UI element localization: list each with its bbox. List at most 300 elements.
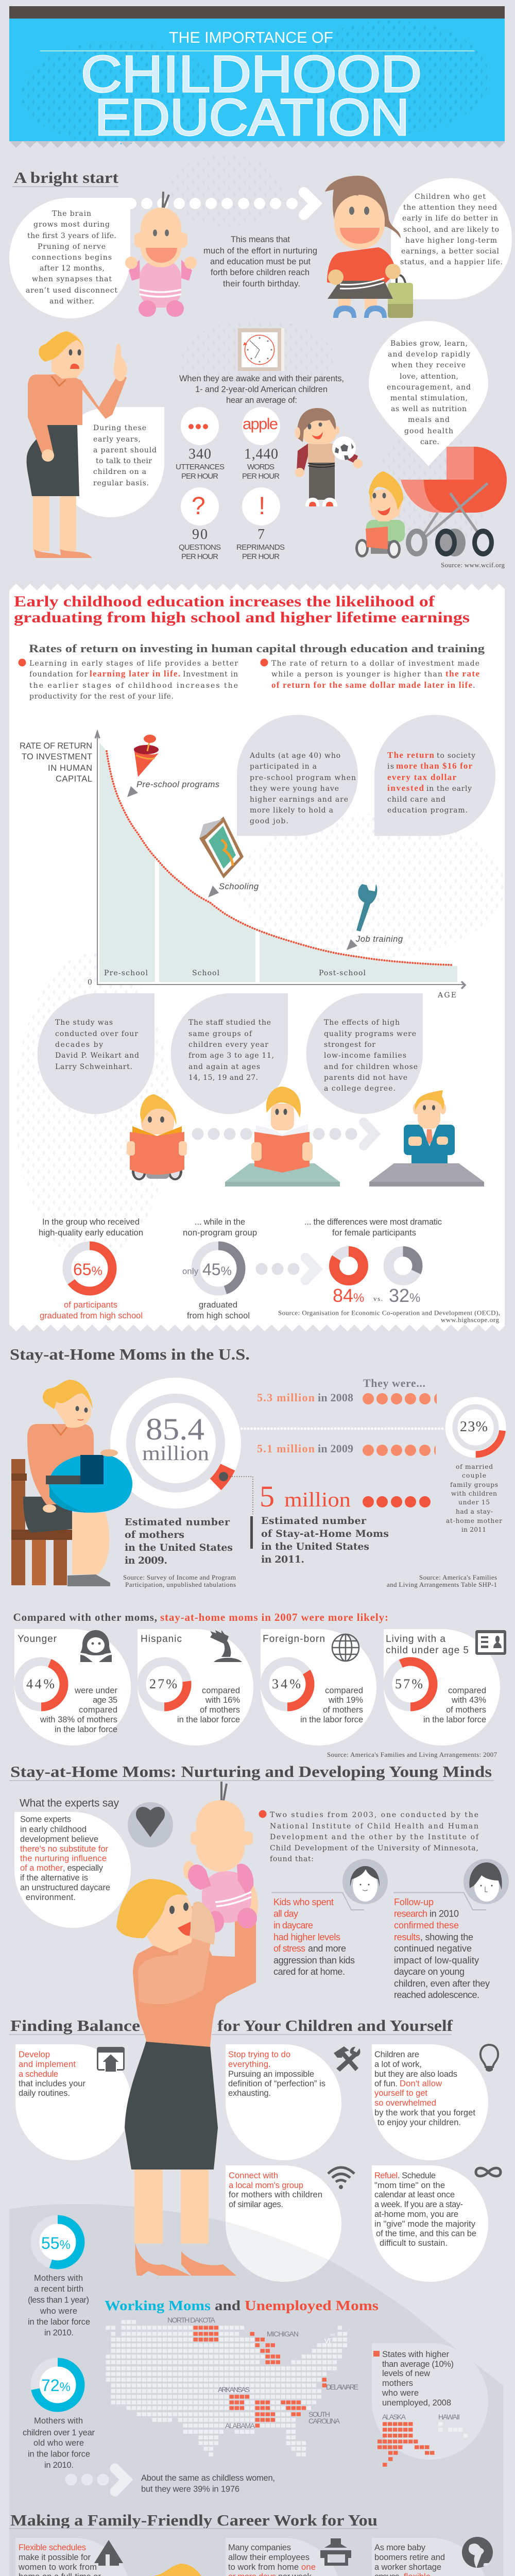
text: effort before fourth birthday: much of the effort in nurturing (203, 246, 317, 256)
subheading: Rates of return on investing in human capital through education and training (29, 642, 485, 655)
stat: 5 million stay-at-home moms (260, 1480, 497, 1588)
stat: they were, by year: They were... (363, 1377, 425, 1389)
finding: follow-up research: children, even after they (394, 1978, 490, 1989)
icon: id card (475, 1630, 506, 1655)
stat: 23 percent: couple (462, 1472, 486, 1479)
stat: 55 percent mothers in labor force: who were (40, 2307, 77, 2316)
text: what the experts say (14, 1797, 131, 1928)
speech bubble: babies grow: Babies grow, learn, (390, 340, 468, 348)
bullet text: rate of return: The rate of return to a dollar of investment made (271, 659, 479, 668)
axis labels (88, 969, 456, 999)
label: pre-school programs: Pre-school programs (136, 780, 219, 789)
heading: finding balance (9, 2016, 453, 2035)
speech bubble: children who get attention: school, and are likely to (403, 226, 499, 234)
dotted arrow (255, 1258, 316, 1280)
axis labels: Post-school (319, 969, 366, 977)
stat: 55 percent mothers in labor force: in 2010. (44, 2328, 74, 2337)
speech bubble: children who get attention: the attention they need (403, 204, 497, 212)
heading: finding balance: for Your Children and Yourself (217, 2016, 453, 2035)
card: child under five: of mothers (446, 1705, 486, 1715)
heading: nurturing young minds: Stay-at-Home Moms: Nurturing and Developing Young Minds (10, 1762, 492, 1781)
stat: 55 percent mothers in labor force: 55% (41, 2234, 71, 2252)
tip: stop trying to do everything: Pursuing an impossible (228, 2070, 314, 2079)
stat: 340 utterances per hour: 340 (188, 446, 211, 462)
bubble: adults at age 40: Adults (at age 40) who (249, 752, 340, 760)
tip: refuel: "mom time" on the (374, 2181, 445, 2190)
heading: family-friendly career: Making a Family-Friendly Career Work for You (10, 2511, 377, 2529)
card: foreign-born: 34% (272, 1676, 301, 1691)
card: younger: 44% (26, 1676, 55, 1691)
map legend: than average (10%) (382, 2360, 454, 2369)
card: hispanic: of mothers (200, 1705, 240, 1715)
card: child under five: with 43% (451, 1696, 486, 1705)
finding: follow-up research: research (394, 1908, 427, 1919)
card: child under five (380, 1629, 506, 1745)
speech bubble: parent should talk: early years, (93, 435, 141, 444)
title (40, 28, 474, 146)
bubble: flexible schedules: Flexible schedules (19, 2543, 86, 2552)
stat: 45 percent: non-program group (183, 1228, 257, 1238)
stat: 90 questions per hour: PER HOUR (181, 552, 218, 561)
stat: 55 percent mothers in labor force: Mothers with (34, 2274, 83, 2283)
title: THE IMPORTANCE OF (169, 28, 333, 46)
finding: follow-up research: impact of low-quality (394, 1955, 479, 1965)
connector line (230, 1477, 253, 1549)
bubble: study conducted: decades by (55, 1041, 103, 1049)
bubble: study conducted (38, 993, 154, 1114)
finding: kids in daycare: in daycare (273, 1920, 313, 1930)
source note: Source: Organisation for Economic Co-operation and Development (OECD), (278, 1309, 500, 1317)
stat: 23 percent: at-home mother (446, 1517, 502, 1524)
map legend: levels of new (382, 2369, 430, 2378)
bubble: adults at age 40: they were young have (250, 785, 339, 793)
bubble: study conducted: David P. Weikart and (55, 1052, 139, 1060)
tip: refuel: difficult to sustain. (380, 2239, 448, 2248)
bubble: effects of high quality: parents did not have (324, 1074, 407, 1082)
icon: book (199, 817, 244, 878)
baby held up (183, 1782, 258, 1933)
icon: house (94, 2540, 123, 2566)
tip: children are loads of fun: yourself to get (374, 2089, 427, 2098)
panel: working moms background (9, 2204, 503, 2576)
label: schooling: Schooling (219, 882, 259, 891)
bubble: effects of high quality: quality programs were (324, 1030, 416, 1038)
text: what the experts say: environment. (26, 1893, 76, 1902)
card: child under five: compared (448, 1686, 486, 1695)
bubble: staff studied: same groups of (188, 1030, 253, 1038)
speech bubble: brain growth: the first 3 years of life. (27, 232, 116, 240)
speech bubble: babies grow: care. (420, 438, 439, 446)
stat: 5 million stay-at-home moms: of Stay-at-Home Moms (261, 1528, 389, 1539)
stat: 23 percent: of married (456, 1463, 493, 1470)
bubble: flexible schedules: make it possible for (19, 2553, 91, 2562)
speech bubble: brain growth: aren’t used disconnect (26, 286, 117, 295)
text: what children hear (179, 374, 344, 405)
bullet text: learning early: the earlier stages of childhood increases the (29, 682, 238, 690)
stat: 65 percent: In the group who received (42, 1217, 140, 1227)
finding: kids in daycare: of stress (273, 1943, 305, 1954)
label: pre-school programs (127, 780, 219, 797)
bullet text: rate of return: . (473, 682, 475, 690)
text: what the experts say: , especially (63, 1863, 104, 1873)
card: younger: with 38% of mothers (40, 1715, 117, 1724)
finding: kids in daycare: Kids who spent (273, 1897, 334, 1907)
text: what the experts say: in early childhood (20, 1825, 87, 1834)
bubble: telecommuting (226, 2538, 351, 2576)
bubble: staff studied (171, 993, 288, 1114)
icon: girl face (342, 1859, 388, 1904)
state labels: MICHIGAN (267, 2330, 299, 2338)
stat: 23 percent: with children (451, 1490, 497, 1497)
finding: follow-up research: in 2010 (430, 1908, 459, 1919)
card: foreign-born: in the labor force (300, 1715, 363, 1724)
card: younger: compared (79, 1705, 117, 1715)
heading: compared with other moms: Compared with other moms, (13, 1611, 157, 1623)
speech bubble: babies grow (369, 321, 488, 466)
tip: children are loads of fun: Children are (374, 2050, 419, 2059)
speech bubble: babies grow: as well as nutrition (391, 405, 467, 413)
dotted arrow: baby to child (125, 192, 315, 215)
state labels: CAROLINA (308, 2417, 340, 2425)
bubble: return to society: invested (387, 783, 424, 793)
bubble: effects of high quality: strongest for (324, 1041, 375, 1049)
bullet text: two studies: Child Development of the University of Minnesota, (270, 1844, 478, 1853)
stat label: number of mothers: Participation, unpublished tabulations (125, 1581, 236, 1588)
bubble: return to society: child care and (387, 795, 445, 804)
text: what children hear: When they are awake and with their parents, (179, 374, 344, 383)
bubble: adults at age 40: good job. (250, 817, 288, 825)
bubble: return to society: more than $16 for (396, 761, 472, 771)
text: effort before fourth birthday: forth before children reach (211, 268, 310, 277)
finding: kids in daycare: all day (273, 1908, 298, 1919)
stat: 5 million stay-at-home moms: Estimated number (261, 1515, 367, 1527)
stat: 72 percent mothers in labor force (23, 2362, 95, 2470)
stat: 45 percent: graduated (199, 1300, 237, 1310)
stat: 1,440 words per hour: apple (243, 415, 278, 433)
finding: follow-up research: , showing the (420, 1932, 473, 1942)
tip: connect with a local group: Connect with (229, 2171, 278, 2180)
stat: 5 million stay-at-home moms: Source: America's Families (419, 1573, 497, 1581)
text: what the experts say: there's no substitute for (20, 1844, 108, 1854)
map legend: mothers (382, 2379, 413, 2388)
speech bubble: babies grow: good health (404, 427, 453, 435)
stat: 340 utterances per hour (176, 407, 225, 481)
illustration: adult at desk (369, 1090, 484, 1187)
state labels: ALABAMA (225, 2421, 255, 2430)
text: what the experts say: if the alternative is (20, 1873, 88, 1883)
illustration: mother holding baby carrier (11, 1380, 132, 1586)
axis labels: School (192, 969, 220, 977)
stat: 55 percent mothers in labor force: in the labor force (28, 2317, 90, 2327)
axis labels: AGE (437, 991, 456, 999)
card: child under five: 57% (395, 1676, 423, 1691)
text: what children hear: hear an average of: (226, 396, 297, 405)
tip: children are loads of fun: by the work that you forget (374, 2108, 475, 2117)
tip: connect with a local group: of similar ages. (229, 2200, 283, 2209)
y-axis label (20, 741, 92, 784)
card: hispanic: Hispanic (141, 1634, 182, 1645)
bubble: study conducted: Larry Schweinhart. (55, 1063, 132, 1071)
stat: 23 percent: under 15 (458, 1499, 490, 1506)
card: foreign-born: compared (325, 1686, 363, 1695)
stat: 72 percent mothers in labor force: in 2010. (44, 2461, 74, 2470)
stat: 84 versus 32 percent (304, 1217, 442, 1306)
stat: 45 percent (182, 1217, 257, 1320)
chart: rate of return by age (20, 732, 465, 999)
y-axis label: IN HUMAN (48, 764, 92, 773)
stat label: number of mothers: in 2009. (125, 1555, 167, 1566)
state labels: NORTH DAKOTA (167, 2316, 216, 2324)
bullet text: learning early: learning later in life. (90, 669, 180, 679)
axis labels: 0 (88, 978, 92, 987)
bubble: return to society: is (387, 762, 394, 771)
stat: 7 reprimands per hour: REPRIMANDS (236, 543, 285, 552)
stat: they were, by year: in 2009 (318, 1442, 353, 1455)
speech bubble: parent should talk: children on a (93, 468, 146, 476)
map: unemployed new mothers by state (106, 2316, 358, 2454)
dotted arrow: children growing up (192, 1122, 374, 1146)
bullet text: two studies: Development and the other by the Institute of (270, 1833, 479, 1841)
bubble: adults at age 40 (237, 715, 358, 836)
panel heading: graduating from high school and higher lifetime earnings (14, 609, 470, 626)
stat: they were, by year: in 2008 (318, 1391, 353, 1404)
bubble: adults at age 40: pre-school program when (250, 774, 356, 782)
tip: connect with a local group (226, 2165, 354, 2282)
bubble: effects of high quality: The effects of high (324, 1019, 400, 1027)
panel: early childhood education (9, 584, 505, 1331)
finding: follow-up research: continued negative (394, 1943, 472, 1954)
source note: Source: www.wcif.org (441, 561, 505, 569)
stat: they were, by year: 5.3 million (257, 1391, 315, 1404)
stat: 72 percent mothers in labor force: children over 1 year (23, 2428, 95, 2437)
tip: develop a schedule: Develop (19, 2050, 50, 2059)
map legend (372, 2343, 488, 2465)
tip: refuel: . Schedule (398, 2171, 436, 2180)
heading: finding balance: Finding Balance (10, 2016, 140, 2035)
text: what the experts say: the nurturing influence (20, 1854, 107, 1863)
heading: working and unemployed moms (105, 2298, 379, 2313)
bubble: staff studied: 14, 15, 19 and 27. (188, 1074, 258, 1082)
stat: 5 million stay-at-home moms: million (284, 1488, 351, 1511)
stat: 84 versus 32 percent: for female participants (332, 1228, 416, 1238)
state labels: NH (330, 2334, 335, 2337)
bubble: telecommuting: one (301, 2563, 316, 2572)
stat: they were, by year: 5.1 million (257, 1442, 315, 1455)
illustration: toddler with book (355, 471, 405, 558)
map legend: who were (382, 2388, 419, 2398)
chart: 85.4 million ring (99, 1367, 252, 1519)
state labels: DELAWARE (326, 2383, 358, 2391)
finding: follow-up research: reached adolescence. (394, 1990, 479, 2000)
label: job training (347, 935, 403, 950)
speech bubble: parent should talk: to talk to their (96, 457, 152, 465)
finding: kids in daycare: and more (308, 1943, 346, 1954)
card: younger: were under (74, 1686, 117, 1695)
bubble: staff studied: and again at ages (188, 1063, 260, 1071)
tip: children are loads of fun: so overwhelmed (374, 2098, 436, 2108)
heading: a bright start: A bright start (14, 168, 119, 187)
stat: 5 million stay-at-home moms: in the United States (261, 1541, 369, 1552)
bubble: flexible schedules more common: a worker shortage (374, 2563, 441, 2572)
y-axis label: TO INVESTMENT (22, 752, 92, 761)
finding: follow-up research: Follow-up (394, 1897, 434, 1907)
bubble: return to society: education program. (387, 806, 468, 815)
bullet text: rate of return (261, 658, 479, 690)
panel heading (14, 593, 470, 626)
tip: stop trying to do everything: Stop trying to do (228, 2050, 290, 2059)
speech bubble: children who get attention: Children who get (415, 193, 486, 201)
bubble: telecommuting: allow their employees (228, 2553, 310, 2562)
dotted arrow with childless women note: but they were 39% in 1976 (141, 2484, 239, 2494)
icon: tools (334, 2046, 360, 2072)
text: what the experts say: Some experts (20, 1815, 71, 1824)
bubble: return to society (374, 715, 495, 836)
map legend: HAWAII (438, 2413, 460, 2421)
heading: compared with other moms: stay-at-home moms in 2007 were more likely: (160, 1611, 388, 1623)
map legend: States with higher (382, 2350, 449, 2359)
map legend: ALASKA (382, 2413, 406, 2421)
y-axis label: CAPITAL (56, 774, 92, 784)
stat: 7 reprimands per hour: ! (259, 493, 265, 520)
speech bubble: brain growth: connections begins (32, 253, 112, 262)
stat: 72 percent mothers in labor force: old who were (33, 2438, 84, 2448)
stat: 23 percent: had a stay- (456, 1508, 493, 1515)
heading: stay-at-home moms in the US: Stay-at-Home Moms in the U.S. (10, 1345, 250, 1363)
bullet text: two studies (259, 1810, 479, 1863)
stat: 5 million stay-at-home moms: in 2011. (261, 1554, 304, 1565)
stat: 72 percent mothers in labor force: Mothers with (34, 2416, 83, 2426)
bullet text: rate of return: while a person is younger is higher than (271, 670, 442, 679)
bubble: return to society: every tax dollar (387, 772, 456, 782)
bubble: effects of high quality: low-income families (324, 1052, 406, 1060)
tip: refuel: at-home mom, you are (374, 2210, 458, 2219)
text: what children hear: 1- and 2-year-old American children (195, 385, 328, 394)
label: schooling (208, 882, 259, 897)
text: effort before fourth birthday (203, 235, 317, 289)
speech bubble: children who get attention: have higher long-term (405, 236, 497, 245)
bubble: flexible schedules (15, 2538, 131, 2576)
finding: follow-up research: confirmed these (394, 1920, 459, 1930)
finding: kids in daycare: cared for at home. (273, 1967, 345, 1977)
illustration: student reading at desk (225, 1087, 340, 1187)
speech bubble: parent should talk: regular basis. (93, 479, 149, 487)
finding: kids in daycare: had higher levels (273, 1932, 340, 1942)
bubble: flexible schedules more common (372, 2537, 493, 2576)
card: foreign-born: Foreign-born (263, 1634, 325, 1645)
card: younger: in the labor force (55, 1725, 117, 1734)
heading: working and unemployed moms: and (215, 2298, 241, 2313)
card: foreign-born (256, 1629, 376, 1745)
tip: refuel: calendar at least once (374, 2190, 455, 2199)
bubble: effects of high quality: a college degree. (324, 1084, 396, 1093)
chart: 85.4 million ring: 85.4 (146, 1412, 204, 1446)
bullet text: learning early (19, 658, 238, 701)
speech bubble: brain growth: Pruning of nerve (38, 243, 106, 251)
speech bubble: brain growth: The brain (52, 210, 91, 218)
source note (278, 1309, 500, 1324)
card: child under five: in the labor force (423, 1715, 486, 1724)
speech bubble: brain growth: grows most during (33, 221, 110, 229)
text: effort before fourth birthday: This means that (231, 235, 290, 244)
dotted arrow with childless women note (65, 2468, 275, 2494)
icon: woman (80, 1630, 112, 1662)
title: EDUCATION (95, 89, 409, 146)
bullet text: learning early: Investment in (183, 670, 238, 679)
speech bubble: brain growth: when synapses that (32, 275, 112, 283)
icon: clock (238, 328, 284, 371)
icon: palm tree (210, 1630, 242, 1662)
stat: 23 percent: family groups (450, 1481, 498, 1488)
stat: 23 percent: in 2011 (461, 1526, 486, 1533)
bullet text: learning early: productivity for the rest of your life. (29, 692, 174, 701)
text: effort before fourth birthday: their fourth birthday. (223, 279, 300, 289)
speech bubble: babies grow: encouragement, and (387, 383, 471, 392)
bullet text: two studies: National Institute of Child Health and Human (270, 1822, 478, 1831)
speech bubble: brain growth: after 12 months, (40, 264, 105, 273)
bubble: telecommuting: Many companies (228, 2543, 291, 2552)
card: hispanic: in the labor force (177, 1715, 240, 1724)
stat: 72 percent mothers in labor force: 72% (41, 2376, 71, 2395)
stat label: number of mothers: Estimated number (125, 1517, 230, 1528)
stat: 7 reprimands per hour: PER HOUR (242, 552, 280, 561)
header banner (9, 6, 505, 148)
stat: 7 reprimands per hour (236, 487, 285, 561)
stat: 55 percent mothers in labor force (28, 2219, 90, 2337)
bullet text: learning early: Learning in early stages of life provides a better (29, 659, 238, 668)
tip: children are loads of fun: of fun. (374, 2079, 398, 2089)
tip: develop a schedule: a schedule (19, 2070, 58, 2079)
tip: children are loads of fun: a lot of work, (374, 2060, 422, 2069)
tip: stop trying to do everything: . (268, 2060, 271, 2069)
stat: 65 percent (39, 1217, 143, 1320)
bubble: staff studied: The staff studied the (188, 1019, 271, 1027)
bullet text: two studies: found that: (270, 1855, 314, 1863)
speech bubble: children who get attention (391, 178, 512, 299)
stat: 5 million stay-at-home moms: 5 (260, 1480, 274, 1513)
speech bubble: babies grow: meals and (408, 416, 450, 424)
text: effort before fourth birthday: and education must be put (210, 257, 311, 266)
icon: party hat (134, 735, 159, 777)
stat: 1,440 words per hour: 1,440 (244, 446, 278, 462)
speech bubble: parent should talk: a parent should (93, 446, 157, 454)
stat: 84 versus 32 percent: ... the differences were most dramatic (304, 1217, 442, 1227)
stat label: number of mothers: of mothers (125, 1529, 184, 1540)
speech bubble: babies grow: mental stimulation, (390, 394, 468, 402)
stat: 65 percent: graduated from high school (40, 1311, 143, 1320)
bubble: flexible schedules more common: boomers retire and (374, 2553, 445, 2562)
tip: develop a schedule: daily routines. (19, 2089, 70, 2098)
bullet text: rate of return: the rate (445, 669, 479, 679)
stat: 1,440 words per hour: PER HOUR (242, 472, 280, 481)
text: what the experts say: an unstructured daycare (20, 1883, 110, 1892)
heading: working and unemployed moms: Unemployed Moms (245, 2298, 379, 2313)
tip: develop a schedule: and implement (19, 2060, 76, 2069)
bubble: flexible schedules more common: As more baby (374, 2543, 426, 2552)
stat: 45 percent: ... while in the (195, 1217, 245, 1227)
dotted arrow with childless women note: About the same as childless women, (141, 2473, 275, 2483)
stat: 340 utterances per hour: PER HOUR (181, 472, 218, 481)
source note: www.highscope.org (441, 1316, 500, 1324)
stat: 90 questions per hour (179, 487, 221, 561)
illustration: mother at computer with stroller (5, 2564, 358, 2576)
tip: refuel: a week. If you are a stay- (374, 2200, 463, 2209)
bullet text: learning early: foundation for (29, 670, 88, 679)
icon: light bulb (480, 2045, 498, 2072)
tip: stop trying to do everything: definition of “perfection” is (228, 2079, 325, 2089)
stat: they were, by year (242, 1377, 443, 1456)
tip: develop a schedule (15, 2044, 131, 2160)
tip: refuel (372, 2165, 501, 2282)
